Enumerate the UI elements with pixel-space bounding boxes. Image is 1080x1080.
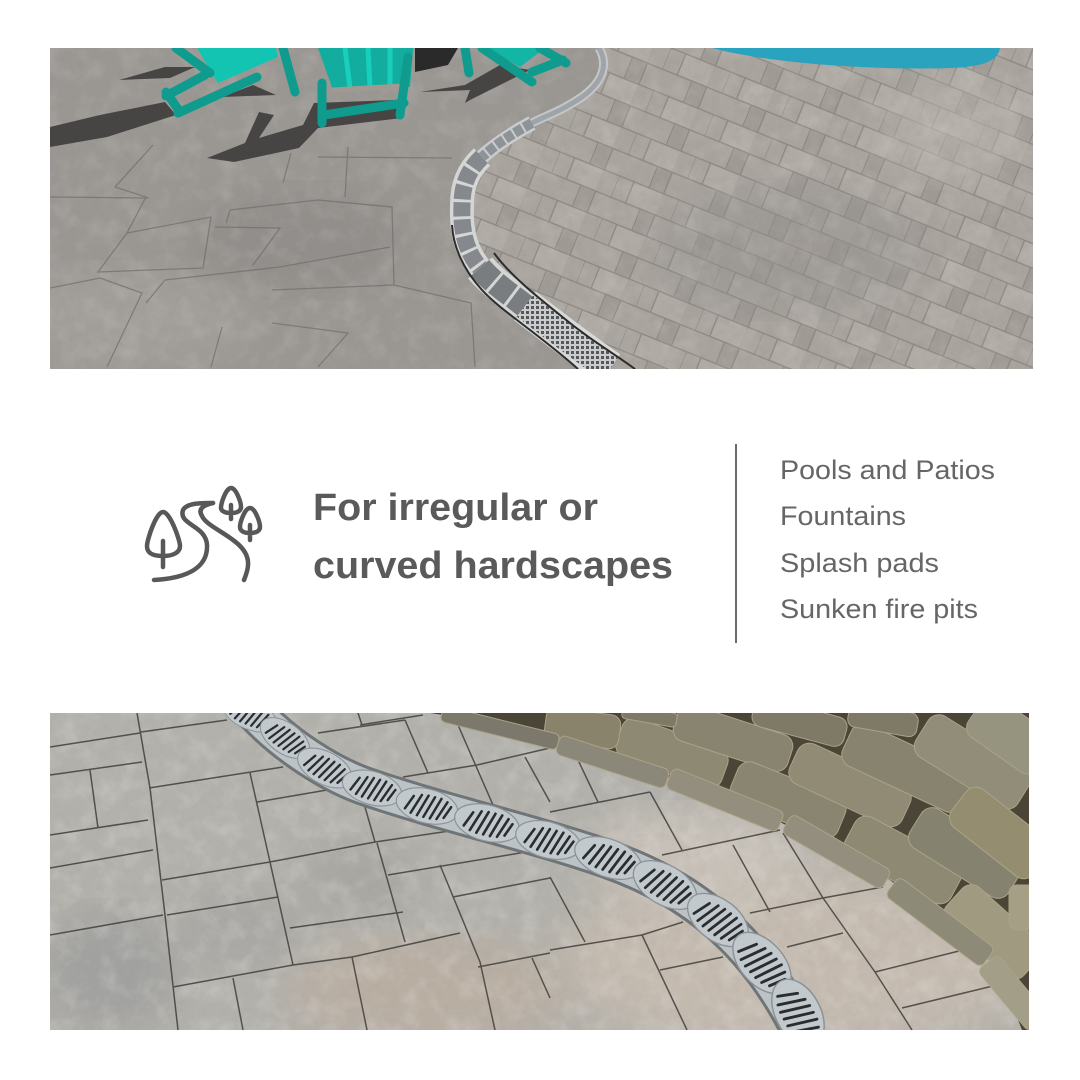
list of applications: Splash pads <box>780 548 939 578</box>
list of applications: Sunken fire pits <box>780 594 978 624</box>
list of applications <box>780 455 995 624</box>
paver joints <box>50 713 997 1030</box>
heading: curved hardscapes <box>313 545 673 587</box>
paver field <box>462 48 1033 369</box>
slot grate segments <box>224 713 825 1030</box>
linear drain channel <box>452 48 635 369</box>
heading: For irregular or <box>313 487 598 529</box>
stamped concrete joints <box>50 145 475 367</box>
shadows <box>50 65 530 162</box>
icon: winding path with trees <box>147 488 260 580</box>
fire pit <box>415 48 458 72</box>
teal chairs <box>166 48 566 123</box>
photo: curved drain between stamped concrete and pavers <box>10 48 1033 370</box>
list of applications: Pools and Patios <box>780 455 995 485</box>
heading <box>313 487 673 587</box>
swimming pool <box>712 48 1000 68</box>
list of applications: Fountains <box>780 501 906 531</box>
divider <box>735 444 737 643</box>
photo: curved slot grate through pavers beside stone wall <box>50 713 1029 1030</box>
retaining wall <box>430 713 1029 1030</box>
